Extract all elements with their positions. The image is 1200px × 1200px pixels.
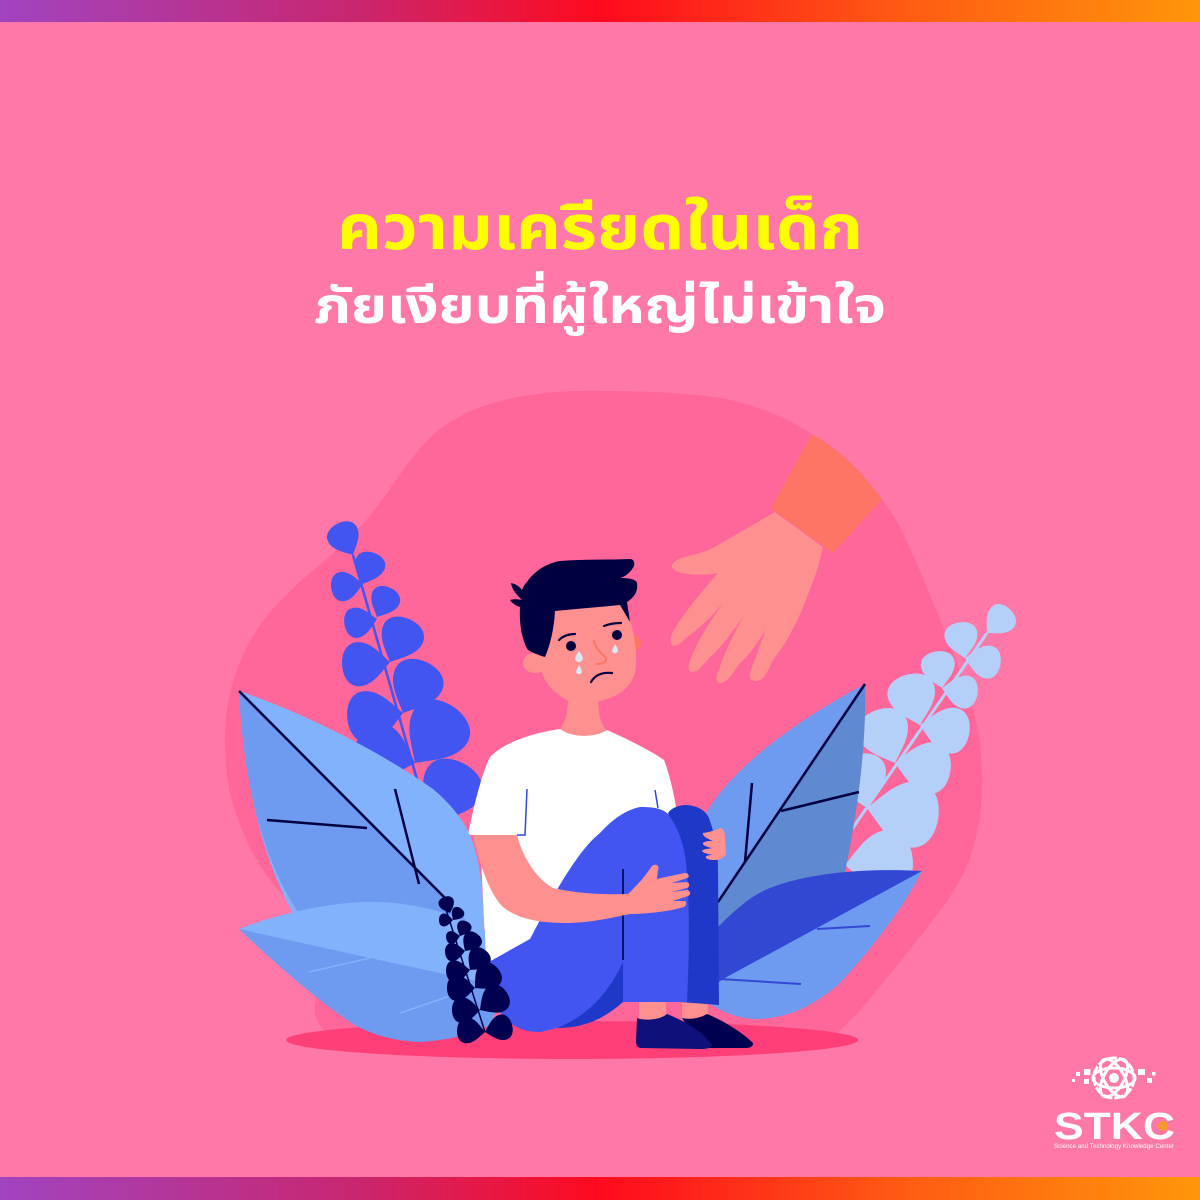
title line 2: ภัยเงียบที่ผู้ใหญ่ไม่เข้าใจ xyxy=(314,271,886,336)
ground shadow xyxy=(286,1021,858,1059)
bottom gradient bar xyxy=(0,1177,1200,1200)
logo tagline: Science and Technology Knowledge Center xyxy=(1054,1144,1174,1150)
logo atom icon xyxy=(1072,1055,1156,1101)
title line 1: ความเครียดในเด็ก xyxy=(337,194,863,263)
arm wrapped around knee xyxy=(473,835,690,923)
white t-shirt xyxy=(468,729,677,965)
eyebrows xyxy=(559,623,621,640)
nose xyxy=(594,641,606,664)
reaching hand xyxy=(671,434,882,683)
rear shoe xyxy=(682,1014,753,1048)
far leg xyxy=(668,805,719,1005)
eyes xyxy=(566,641,576,651)
background blob xyxy=(225,391,982,1058)
open hand xyxy=(671,512,823,683)
near ear xyxy=(523,653,547,673)
logo orange dot xyxy=(1158,1121,1168,1131)
face xyxy=(540,600,636,701)
boy arm and hands xyxy=(473,828,726,923)
far ear xyxy=(625,635,641,651)
title xyxy=(314,194,886,336)
boy legs xyxy=(487,805,753,1049)
right lower leaf xyxy=(705,870,922,1019)
ankles xyxy=(639,1000,708,1022)
top gradient bar xyxy=(0,0,1200,22)
left large leaf xyxy=(239,691,486,1000)
periwinkle fern behind left leaf xyxy=(323,517,491,836)
pale blue fern behind right leaf xyxy=(833,599,1021,896)
front shoe xyxy=(636,1014,712,1049)
sleeve cuff xyxy=(771,434,882,553)
logo wordmark: STKC xyxy=(1054,1106,1175,1148)
hair xyxy=(510,559,637,657)
neck xyxy=(558,695,608,738)
near leg and seat xyxy=(487,807,689,1032)
dark navy small fern xyxy=(437,894,515,1045)
left lower leaf xyxy=(239,902,510,1042)
knee crease xyxy=(622,869,624,960)
shirt fold lines xyxy=(517,789,658,835)
STKC logo xyxy=(1054,1055,1175,1150)
seat shadow xyxy=(557,962,623,1028)
hand behind knee xyxy=(702,828,726,860)
boy head xyxy=(510,559,641,701)
right large leaf xyxy=(705,684,865,960)
mouth xyxy=(591,673,612,682)
tears xyxy=(575,644,618,674)
